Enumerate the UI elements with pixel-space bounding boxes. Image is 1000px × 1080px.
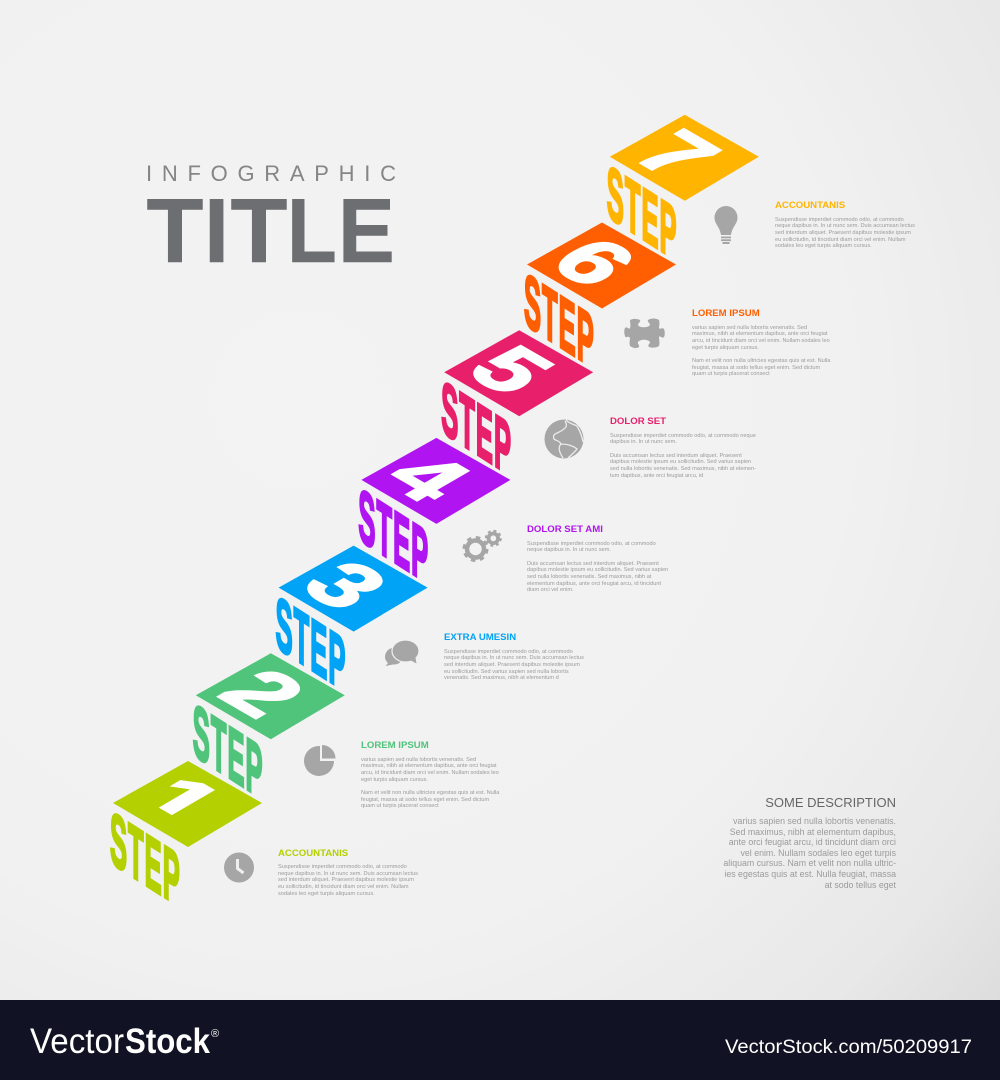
text block: step 5: sed nulla lobortis venenatis. Sed maximus, nibh at elemen-	[610, 466, 756, 472]
step 6	[524, 222, 676, 385]
text block: step 6: maximus, nibh at elementum dapibus, ante orci feugiat	[692, 331, 828, 337]
text block: step 7: sed interdum aliquet. Praesent dapibus molestie ipsum	[775, 230, 911, 236]
icon: light bulb	[714, 206, 738, 244]
text block: step 7: eu sollicitudin, id tincidunt diam orci vel enim. Nullam	[775, 237, 906, 243]
step 2: STEP	[193, 688, 264, 815]
text block: step 4	[527, 524, 668, 593]
description block: aliquam cursus. Nam et velit non nulla ultric-	[723, 858, 896, 868]
footer logo: Vector	[30, 1022, 124, 1061]
step 4: STEP	[358, 472, 429, 600]
text block: step 6: feugiat, massa at sodo tellus eget enim. Sed dictum	[692, 365, 820, 371]
text block: step 5: dapibus in. In ut nunc sem.	[610, 439, 677, 445]
text block: step 1: ACCOUNTANIS	[278, 848, 348, 858]
icon: clock	[224, 852, 254, 882]
step 5: STEP	[441, 364, 512, 492]
title: T	[230, 181, 287, 282]
title: T	[146, 181, 203, 282]
text block: step 7	[775, 200, 915, 249]
text block: step 2: LOREM IPSUM	[361, 740, 429, 751]
text block: step 5: Duis accumsan lectus sed interdum aliquet. Praesent	[610, 453, 742, 459]
text block: step 2: maximus, nibh at elementum dapibus, ante orci feugiat	[361, 763, 497, 769]
text block: step 3: EXTRA UMESIN	[444, 632, 516, 643]
step 7: STEP	[607, 149, 678, 277]
footer bar	[0, 1000, 1000, 1080]
step 3: 3	[282, 548, 409, 622]
step 4: 4	[365, 441, 492, 514]
text block: step 6: arcu, id tincidunt diam orci vel enim. Nullam sodales leo	[692, 338, 830, 344]
step 3	[276, 546, 428, 708]
step 2: 2	[200, 656, 326, 730]
title: L	[287, 181, 337, 282]
text block: step 6: LOREM IPSUM	[692, 308, 760, 319]
text block: step 3: venenatis. Sed maximus, nibh at elementum d	[444, 675, 559, 681]
description block: vel enim. Nullam sodales leo eget turpis	[740, 848, 896, 858]
step 4	[358, 438, 510, 600]
text block: step 6: Nam et velit non nulla ultricies egestas quis at est. Nulla	[692, 358, 830, 364]
text block: step 1: Suspendisse imperdiet commodo odio, at commodo	[278, 864, 407, 870]
step 2	[193, 653, 345, 815]
icon: chat bubbles	[385, 640, 419, 666]
text block: step 6: varius sapien sed nulla lobortis venenatis. Sed	[692, 324, 807, 330]
text block: step 1: eu sollicitudin, id tincidunt diam orci vel enim. Nullam	[278, 884, 409, 890]
text block: step 3	[444, 632, 584, 681]
step 1: 1	[117, 764, 244, 837]
text block: step 1	[278, 848, 418, 897]
text block: step 2: eget turpis aliquam cursus.	[361, 777, 428, 783]
icon: gears	[464, 531, 500, 560]
text block: step 4: sed nulla lobortis venenatis. Sed maximus, nibh at	[527, 574, 651, 580]
text block: step 5: Suspendisse imperdiet commodo odio, at commodo neque	[610, 432, 756, 438]
description block: ies egestas quis at est. Nulla feugiat, massa	[724, 869, 896, 879]
text block: step 7: ACCOUNTANIS	[775, 200, 845, 211]
footer logo	[30, 1022, 219, 1061]
text block: step 5	[610, 416, 756, 479]
text block: step 4: neque dapibus in. In ut nunc sem.	[527, 547, 611, 553]
text block: step 7: neque dapibus in. In ut nunc sem. Duis accumsan lectus	[775, 223, 915, 229]
footer logo: Stock	[125, 1022, 210, 1061]
text block: step 2: feugiat, massa at sodo tellus eget enim. Sed dictum	[361, 797, 489, 803]
text block: step 4: Duis accumsan lectus sed interdum aliquet. Praesent	[527, 561, 659, 567]
description block: varius sapien sed nulla lobortis venenatis.	[733, 816, 896, 826]
text block: step 2: varius sapien sed nulla lobortis venenatis. Sed	[361, 756, 476, 762]
title	[146, 161, 396, 282]
text block: step 4: elementum dapibus, ante orci feugiat arcu, id tincidunt	[527, 581, 661, 587]
description block: Sed maximus, nibh at elementum dapibus,	[730, 827, 896, 837]
step 7: 7	[614, 118, 740, 191]
text block: step 6	[692, 308, 830, 377]
text block: step 1: neque dapibus in. In ut nunc sem. Duis accumsan lectus	[278, 871, 418, 877]
text block: step 5: DOLOR SET	[610, 416, 666, 427]
text block: step 2	[361, 740, 500, 809]
text block: step 3: sed interdum aliquet. Praesent dapibus molestie ipsum	[444, 662, 580, 668]
text block: step 5: tum dapibus, ante orci feugiat arcu, id	[610, 473, 703, 479]
icon: pie chart	[304, 745, 336, 776]
step 5: 5	[448, 333, 575, 406]
step 1: STEP	[110, 795, 181, 923]
text block: step 7: Suspendisse imperdiet commodo odio, at commodo	[775, 216, 904, 222]
text block: step 2: Nam et velit non nulla ultricies egestas quis at est. Nulla	[361, 790, 499, 796]
text block: step 4: dapibus molestie ipsum eu sollicitudin. Sed varius sapien	[527, 567, 668, 573]
description block: SOME DESCRIPTION	[765, 795, 896, 810]
step 7	[607, 115, 759, 277]
text block: step 4: Suspendisse imperdiet commodo odio, at commodo	[527, 540, 656, 546]
text block: step 5: dapibus molestie ipsum eu sollicitudin. Sed varius sapien	[610, 459, 751, 465]
text block: step 3: Suspendisse imperdiet commodo odio, at commodo	[444, 648, 573, 654]
text block: step 4: DOLOR SET AMI	[527, 524, 603, 535]
footer logo: ®	[211, 1028, 219, 1040]
text block: step 2: quam ut turpis placerat consect	[361, 803, 439, 809]
title: E	[338, 180, 395, 282]
title: I	[204, 181, 229, 282]
step 6: STEP	[524, 257, 595, 385]
step 5	[441, 330, 593, 492]
icon: puzzle piece	[624, 318, 665, 348]
text block: step 3: neque dapibus in. In ut nunc sem. Duis accumsan lectus	[444, 655, 584, 661]
text block: step 7: sodales leo eget turpis aliquam cursus.	[775, 243, 872, 249]
description block: at sodo tellus eget	[825, 880, 896, 890]
text block: step 2: arcu, id tincidunt diam orci vel enim. Nullam sodales leo	[361, 770, 499, 776]
footer url: VectorStock.com/50209917	[725, 1036, 972, 1058]
icon: globe	[544, 420, 584, 458]
text block: step 1: sodales leo eget turpis aliquam cursus.	[278, 891, 375, 897]
text block: step 6: eget turpis aliquam cursus.	[692, 345, 759, 351]
description block: ante orci feugiat arcu, id tincidunt diam orci	[729, 837, 896, 847]
text block: step 4: diam orci vel enim.	[527, 587, 574, 593]
text block: step 6: quam ut turpis placerat consect	[692, 371, 770, 377]
text block: step 3: eu sollicitudin. Sed varius sapien sed nulla lobortis	[444, 669, 569, 675]
step 3: STEP	[276, 580, 346, 708]
title: INFOGRAPHIC	[146, 161, 396, 186]
text block: step 1: sed interdum aliquet. Praesent dapibus molestie ipsum	[278, 877, 414, 883]
step 6: 6	[531, 225, 658, 299]
step 1	[110, 761, 262, 902]
description block	[723, 795, 896, 890]
